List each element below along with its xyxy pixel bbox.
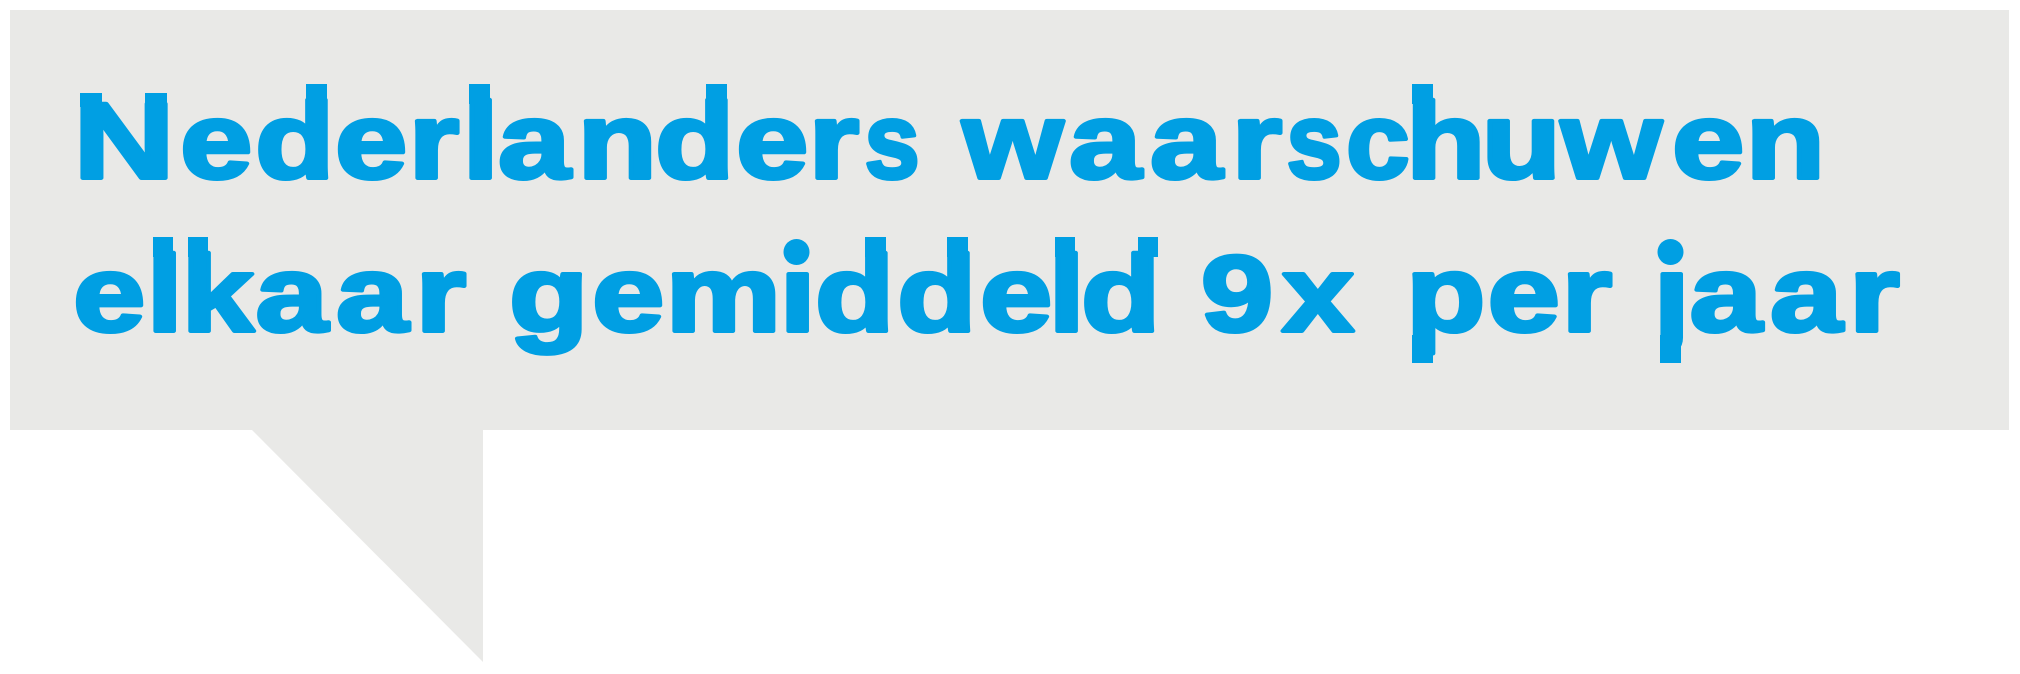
bubble tail (252, 430, 483, 662)
title line 2: 9x (1201, 234, 1354, 355)
title line 1 (74, 81, 1825, 202)
title line 1: waarschuwen (961, 81, 1825, 202)
title line 1: Nederlanders (74, 81, 920, 202)
title line 2 (73, 234, 1900, 355)
title line 2: gemiddeld (509, 234, 1160, 355)
title (73, 81, 1900, 369)
title line 2: per (1406, 234, 1612, 355)
title line 2: elkaar (73, 234, 466, 355)
title line 2: jaar (1652, 234, 1900, 355)
bubble panel (10, 10, 2009, 430)
